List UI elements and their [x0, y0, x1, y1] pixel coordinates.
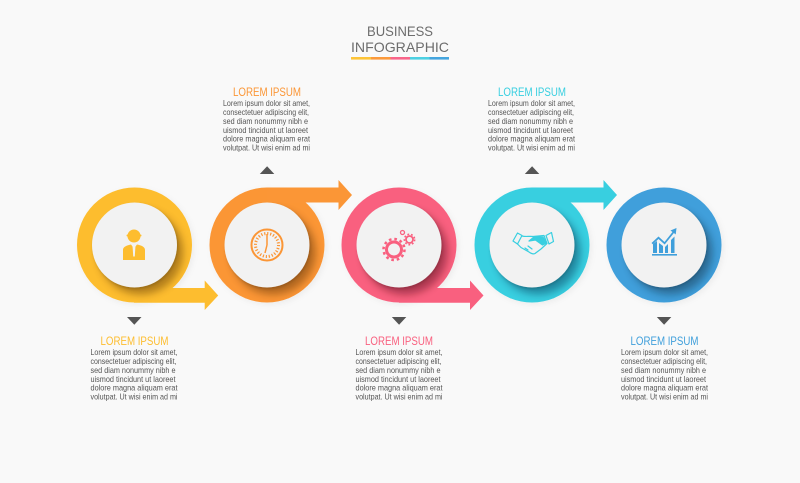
text block: step 5 — [621, 335, 709, 402]
text block: step 1: consectetuer adipiscing elit, — [90, 356, 176, 366]
text block: step 1: dolore magna aliquam erat — [90, 383, 178, 393]
title: BUSINESS — [367, 23, 433, 39]
text block: step 1: volutpat. Ut wisi enim ad mi — [90, 392, 178, 402]
text block: step 1: LOREM IPSUM — [100, 335, 168, 348]
arrow — [134, 280, 218, 310]
title: INFOGRAPHIC — [351, 39, 449, 55]
marker: step 3 triangle — [392, 317, 406, 325]
text block: step 3: sed diam nonummy nibh e — [356, 365, 441, 375]
text block: step 2: dolore magna aliquam erat — [223, 134, 311, 144]
text block: step 4: consectetuer adipiscing elit, — [488, 107, 574, 117]
text block: step 2: volutpat. Ut wisi enim ad mi — [223, 142, 310, 152]
text block: step 5: volutpat. Ut wisi enim ad mi — [621, 392, 708, 402]
text block: step 5: consectetuer adipiscing elit, — [621, 356, 707, 366]
text block: step 1: sed diam nonummy nibh e — [90, 365, 176, 375]
title — [351, 23, 449, 60]
text block: step 5: Lorem ipsum dolor sit amet, — [621, 347, 708, 357]
marker: step 5 triangle — [657, 317, 671, 325]
text block: step 5: sed diam nonummy nibh e — [621, 365, 706, 375]
icon: clock — [252, 230, 282, 260]
text block: step 4: sed diam nonummy nibh e — [488, 116, 573, 126]
text block: step 4: dolore magna aliquam erat — [488, 134, 576, 144]
step 3: pink circle with arrow — [342, 188, 484, 310]
text block: step 3 — [356, 335, 443, 402]
step 1: yellow circle with arrow — [77, 188, 218, 310]
marker: step 4 triangle — [525, 166, 539, 174]
arrow — [532, 180, 617, 210]
text block: step 2: uismod tincidunt ut laoreet — [223, 125, 309, 135]
text block: step 2: Lorem ipsum dolor sit amet, — [223, 98, 310, 108]
text block: step 3: volutpat. Ut wisi enim ad mi — [356, 392, 443, 402]
text block: step 4: uismod tincidunt ut laoreet — [488, 125, 574, 135]
icon: handshake — [513, 232, 554, 254]
text block: step 3: consectetuer adipiscing elit, — [356, 356, 442, 366]
icon: worker — [123, 230, 145, 260]
text block: step 2: consectetuer adipiscing elit, — [223, 107, 309, 117]
step 4: cyan circle with arrow — [474, 180, 617, 302]
text block: step 1 — [90, 335, 178, 402]
text block: step 4: Lorem ipsum dolor sit amet, — [488, 98, 575, 108]
icon: gears — [384, 230, 415, 260]
text block: step 3: LOREM IPSUM — [365, 335, 433, 348]
arrow — [399, 280, 484, 310]
icon: growth chart — [652, 228, 677, 256]
text block: step 2 — [223, 86, 311, 152]
marker: step 1 triangle — [127, 317, 142, 325]
text block: step 1: uismod tincidunt ut laoreet — [90, 374, 176, 384]
text block: step 5: uismod tincidunt ut laoreet — [621, 374, 707, 384]
arrow — [267, 180, 352, 210]
text block: step 1: Lorem ipsum dolor sit amet, — [90, 347, 178, 357]
text block: step 2: LOREM IPSUM — [233, 86, 301, 99]
marker: step 2 triangle — [260, 166, 274, 174]
step 5: blue circle — [606, 188, 722, 302]
text block: step 3: uismod tincidunt ut laoreet — [356, 374, 441, 384]
text block: step 3: Lorem ipsum dolor sit amet, — [356, 347, 442, 357]
step 2: orange circle with arrow — [210, 180, 352, 302]
text block: step 5: dolore magna aliquam erat — [621, 383, 709, 393]
text block: step 5: LOREM IPSUM — [630, 335, 698, 348]
text block: step 4: volutpat. Ut wisi enim ad mi — [488, 142, 575, 152]
text block: step 3: dolore magna aliquam erat — [356, 383, 443, 393]
text block: step 2: sed diam nonummy nibh e — [223, 116, 308, 126]
text block: step 4 — [488, 86, 576, 152]
text block: step 4: LOREM IPSUM — [498, 86, 566, 99]
